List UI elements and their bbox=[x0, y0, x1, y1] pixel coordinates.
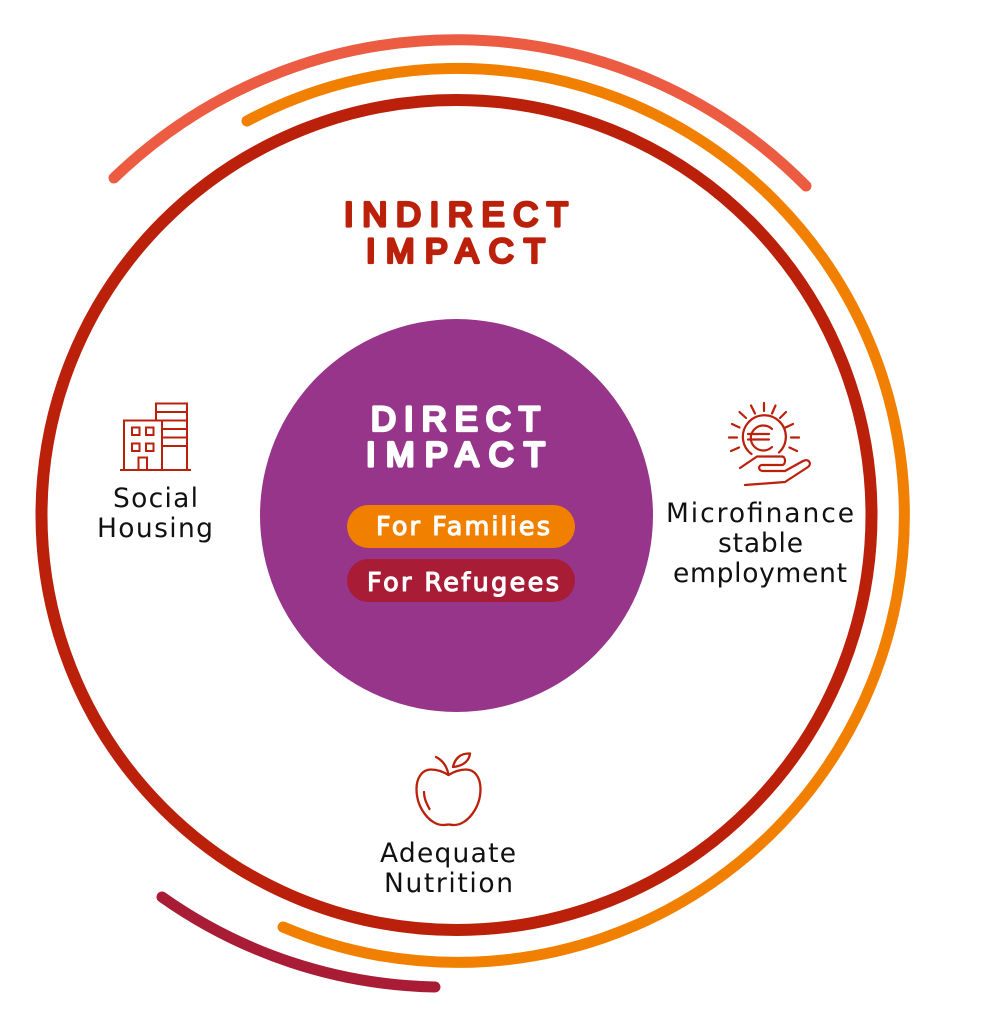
heading: indirect impact: IMPACT bbox=[366, 232, 545, 270]
icon: euro coin in hand bbox=[729, 403, 810, 485]
pill: for families bbox=[347, 505, 575, 548]
arc: coral top bbox=[114, 40, 806, 186]
arc: orange right bbox=[247, 68, 904, 962]
label: social housing bbox=[97, 483, 213, 544]
heading: direct impact: IMPACT bbox=[366, 436, 545, 474]
label: microfinance stable employment: employment bbox=[673, 558, 847, 589]
pill: for refugees bbox=[347, 559, 575, 602]
label: social housing: Social bbox=[113, 483, 198, 514]
label: adequate nutrition: Nutrition bbox=[384, 868, 513, 899]
arc: maroon bottom bbox=[162, 897, 435, 987]
label: microfinance stable employment bbox=[666, 498, 854, 589]
heading: indirect impact bbox=[344, 196, 568, 270]
panel: direct impact circle bbox=[260, 319, 653, 712]
heading: direct impact: DIRECT bbox=[371, 400, 540, 438]
label: microfinance stable employment: stable bbox=[718, 528, 803, 559]
icon: apple bbox=[416, 753, 480, 825]
heading: direct impact bbox=[366, 400, 545, 474]
label: adequate nutrition bbox=[380, 838, 516, 899]
pill: for refugees: For Refugees bbox=[367, 568, 559, 598]
label: microfinance stable employment: Microfinance bbox=[666, 498, 854, 529]
ring: indirect impact boundary bbox=[42, 100, 872, 930]
label: adequate nutrition: Adequate bbox=[380, 838, 516, 869]
heading: indirect impact: INDIRECT bbox=[344, 196, 568, 234]
pill: for families: For Families bbox=[376, 512, 550, 542]
label: social housing: Housing bbox=[97, 513, 213, 544]
icon: buildings bbox=[120, 404, 191, 470]
